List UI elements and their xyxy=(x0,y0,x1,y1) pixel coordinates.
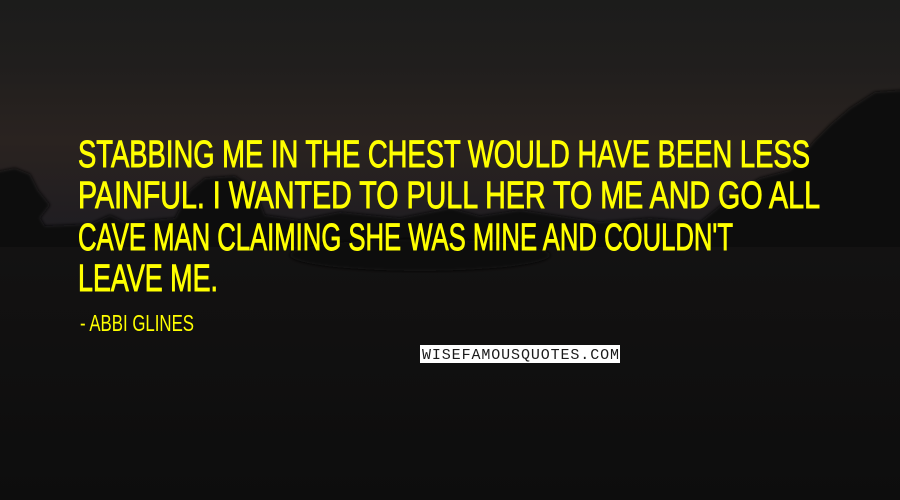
background: dark tree clump xyxy=(290,239,550,271)
background: tree silhouettes xyxy=(0,90,900,255)
background: dark field xyxy=(0,247,900,500)
author attribution: - ABBI GLINES xyxy=(80,310,194,336)
quote text xyxy=(78,134,820,300)
quote line 4: LEAVE ME. xyxy=(78,258,218,300)
background: dusk sky xyxy=(0,0,900,255)
watermark badge: WISEFAMOUSQUOTES.COM xyxy=(422,347,619,364)
